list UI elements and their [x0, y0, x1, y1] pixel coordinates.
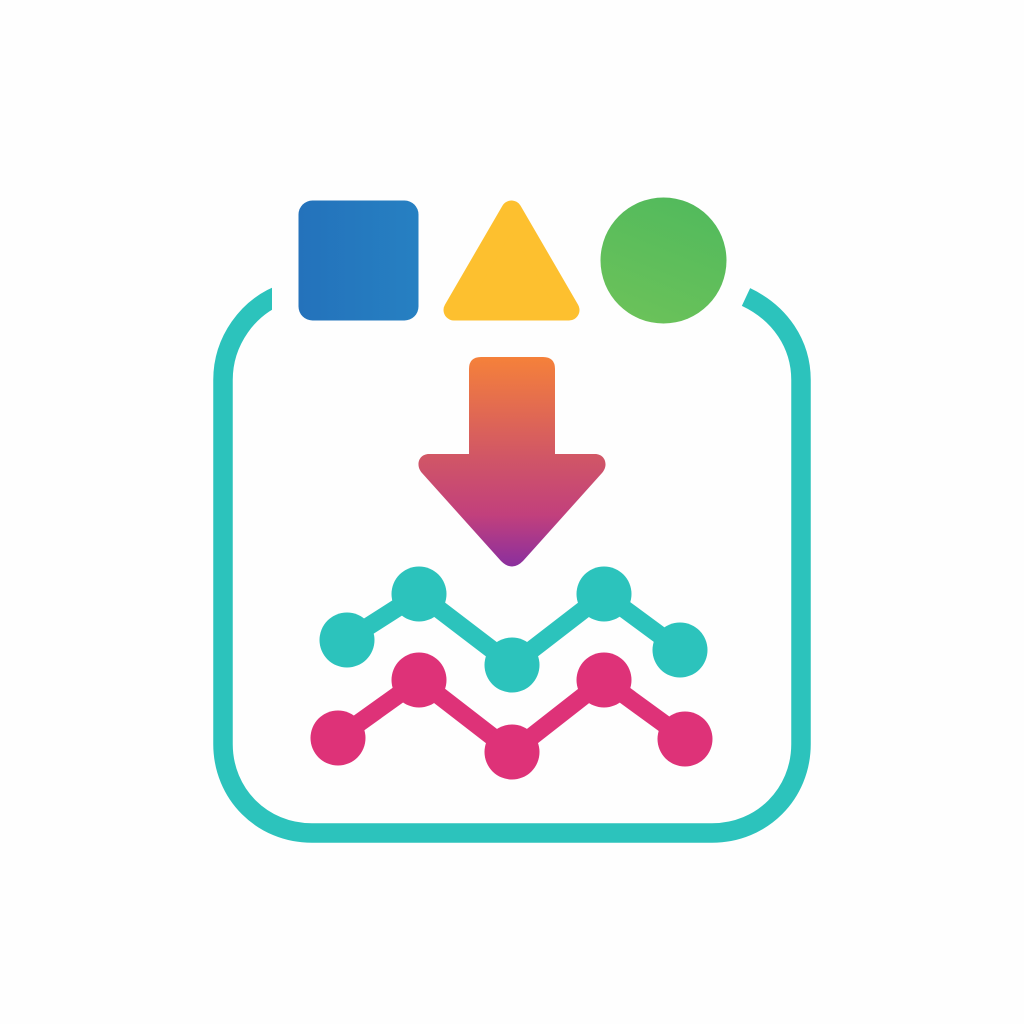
icon: blue square — [298, 200, 418, 320]
icon: green circle — [600, 198, 726, 324]
icon: data transformation logo — [213, 198, 811, 843]
chart: teal line with nodes — [320, 566, 708, 692]
arrow: gradient down arrow — [418, 357, 606, 566]
panel: rounded teal frame — [223, 293, 801, 833]
chart: magenta line with nodes — [310, 652, 712, 780]
icon: yellow triangle — [454, 211, 569, 310]
